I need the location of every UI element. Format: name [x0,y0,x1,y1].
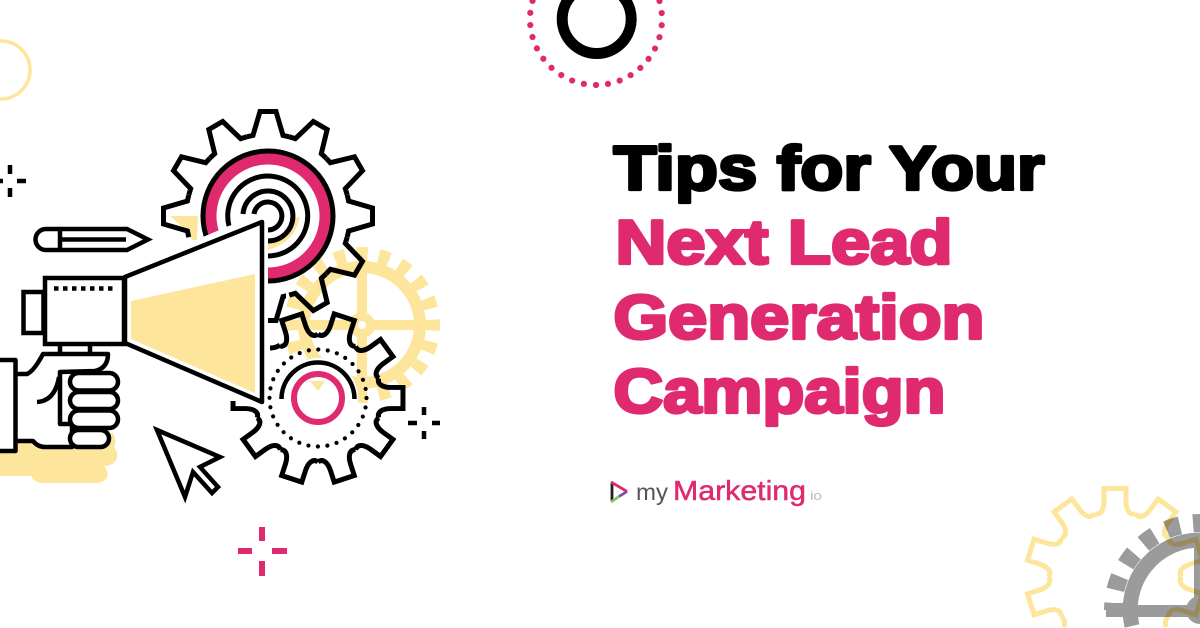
icon: hand holding megaphone [0,354,118,451]
title [614,134,1044,426]
icon: pencil [36,229,148,250]
decoration: black crosshair right [408,407,440,439]
icon: cursor arrow [157,430,220,497]
small gear [233,311,403,485]
title: Generation [614,284,984,352]
logo: myMarketing.io [611,475,822,506]
logo: myMarketing.io: Marketing [673,475,806,506]
white halo around megaphone [120,212,268,412]
title: Campaign [614,358,946,426]
yellow accents behind gears [170,216,325,391]
background yellow gear [291,254,433,396]
big gear [164,112,372,320]
decoration: black crosshair left [0,165,26,197]
bottom right gray gear [1106,523,1200,626]
decoration: yellow circle top left [0,41,30,99]
logo: myMarketing.io: my [636,479,669,505]
title: Next Lead [616,208,952,278]
decoration: pink crosshair [238,527,287,576]
decoration: top circle with pink dots [530,0,662,85]
white disc behind small gear centre [278,358,358,438]
yellow hand shadow [0,433,117,483]
title: Tips for Your [614,134,1044,204]
logo: myMarketing.io: io [810,488,822,503]
bottom right yellow outline gear [1024,488,1200,627]
icon: megaphone [24,222,262,402]
